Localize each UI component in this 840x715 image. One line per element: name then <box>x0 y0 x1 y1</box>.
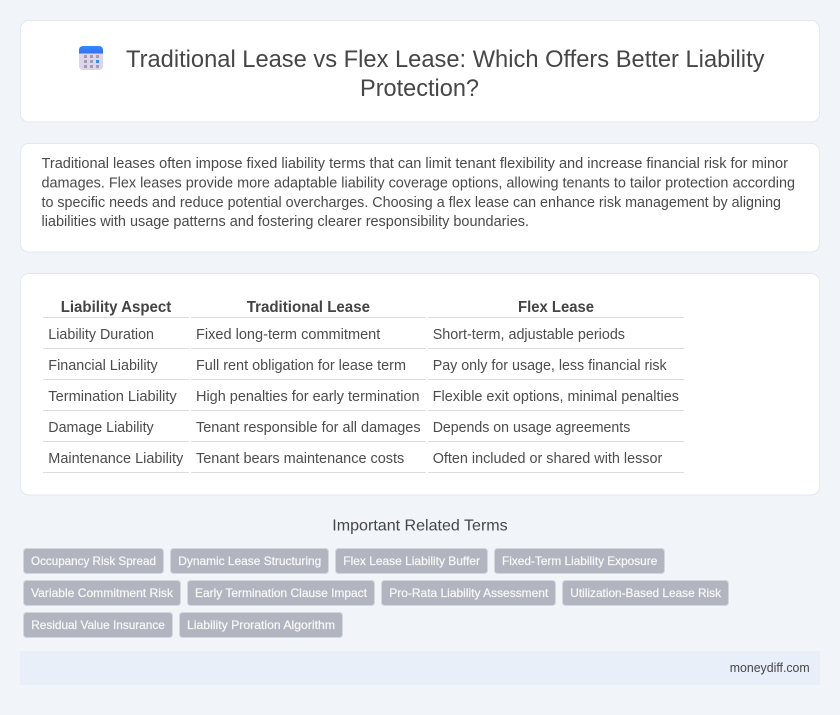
row: termination liability: Termination Liability <box>48 389 178 405</box>
row: maintenance liability: Often included or shared with lessor <box>433 451 662 467</box>
row: liability duration: Fixed long-term commitment <box>196 327 380 343</box>
tag: Early Termination Clause Impact <box>195 586 368 600</box>
heading: related terms: Important Related Terms <box>332 518 508 535</box>
tag: Occupancy Risk Spread <box>31 554 156 568</box>
row: maintenance liability <box>48 451 662 467</box>
row: financial liability <box>48 358 667 374</box>
tag <box>562 580 728 606</box>
tag: Pro-Rata Liability Assessment <box>389 586 549 600</box>
description text: damages. Flex leases provide more adaptable liability coverage options, allowing tenants to tailor protection according <box>42 175 795 191</box>
tag: Dynamic Lease Structuring <box>178 554 321 568</box>
row: liability duration <box>48 327 625 343</box>
description text <box>42 156 795 230</box>
row: financial liability: Pay only for usage, less financial risk <box>433 358 667 374</box>
table header row: Traditional Lease <box>247 299 370 316</box>
tag: Fixed-Term Liability Exposure <box>502 554 658 568</box>
icon: calendar <box>79 46 103 70</box>
title: Protection? <box>360 75 479 102</box>
footer <box>20 651 820 685</box>
row: financial liability: Financial Liability <box>48 358 158 374</box>
panel: description <box>20 144 820 252</box>
tag <box>24 548 164 574</box>
tag <box>188 580 374 606</box>
description text: to specific needs and reduce potential overcharges. Choosing a flex lease can enhance risk management by aligning <box>42 195 781 211</box>
row: damage liability: Tenant responsible for all damages <box>196 420 421 436</box>
row: damage liability: Depends on usage agreements <box>433 420 630 436</box>
row: damage liability <box>48 420 630 436</box>
tag <box>336 548 488 574</box>
title: Traditional Lease vs Flex Lease: Which Offers Better Liability <box>126 46 765 73</box>
table header row: Liability Aspect <box>61 299 172 316</box>
row: termination liability: Flexible exit options, minimal penalties <box>433 389 679 405</box>
tag: Utilization-Based Lease Risk <box>570 586 722 600</box>
row: financial liability: Full rent obligation for lease term <box>196 358 406 374</box>
tag <box>24 580 180 606</box>
panel: header <box>20 20 820 122</box>
tag <box>170 548 328 574</box>
row: maintenance liability: Tenant bears maintenance costs <box>196 451 404 467</box>
tag <box>24 612 172 638</box>
tag <box>180 612 342 638</box>
row: maintenance liability: Maintenance Liability <box>48 451 184 467</box>
row: termination liability: High penalties for early termination <box>196 389 420 405</box>
description text: liabilities with usage patterns and fostering clearer responsibility boundaries. <box>42 214 529 230</box>
row: termination liability <box>48 389 679 405</box>
row: liability duration: Liability Duration <box>48 327 154 343</box>
tag: Variable Commitment Risk <box>31 586 174 600</box>
table header row <box>61 299 594 316</box>
tag: Flex Lease Liability Buffer <box>343 554 480 568</box>
title <box>126 46 765 102</box>
tag <box>382 580 556 606</box>
footer: moneydiff.com <box>730 660 810 675</box>
tag <box>494 548 664 574</box>
row: liability duration: Short-term, adjustable periods <box>433 327 625 343</box>
row: damage liability: Damage Liability <box>48 420 154 436</box>
tag cloud: related terms <box>24 548 728 638</box>
table header row: Flex Lease <box>518 299 594 316</box>
tag: Liability Proration Algorithm <box>187 618 335 632</box>
tag: Residual Value Insurance <box>31 618 165 632</box>
description text: Traditional leases often impose fixed liability terms that can limit tenant flexibility and increase financial risk for minor <box>42 156 788 172</box>
panel: comparison table <box>20 274 820 495</box>
